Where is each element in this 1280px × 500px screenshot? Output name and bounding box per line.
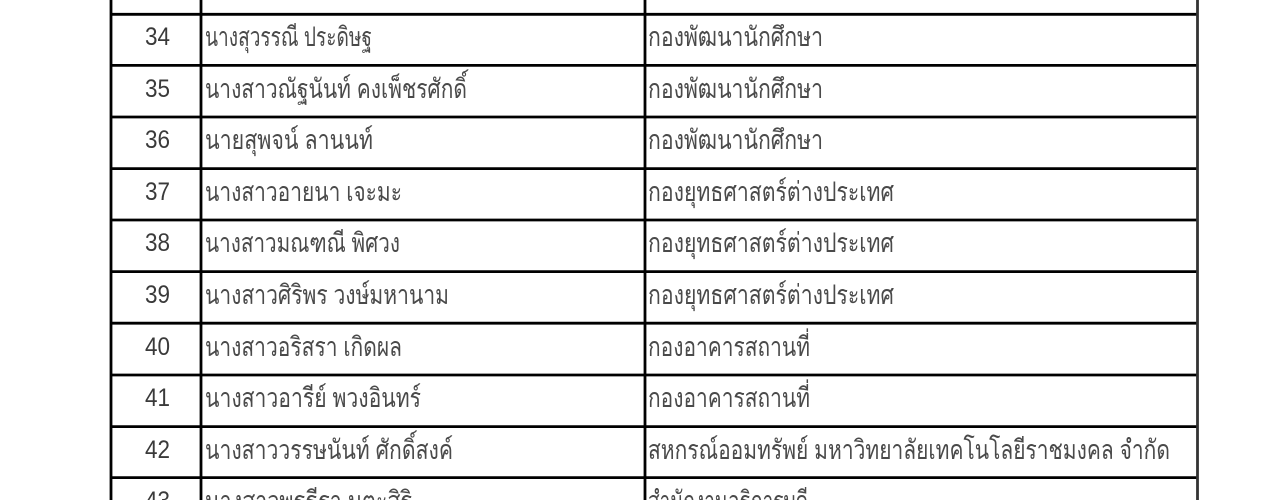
row 38 [145,227,894,260]
row 37 [145,176,894,209]
row 38: นางสาวมณฑณี พิศวง [205,228,400,258]
row 35: กองพัฒนานักศึกษา [648,74,823,104]
row 37: นางสาวอายนา เจะมะ [205,177,402,207]
row 34: นางสุวรรณี ประดิษฐ [205,22,372,54]
row 37: กองยุทธศาสตร์ต่างประเทศ [648,176,894,209]
row 36: นายสุพจน์ ลานนท์ [205,124,373,157]
row 38: กองยุทธศาสตร์ต่างประเทศ [648,227,894,260]
row 43 (clipped at bottom edge) [145,486,808,500]
row 40: นางสาวอริสรา เกิดผล [205,332,402,362]
row 39: นางสาวศิริพร วงษ์มหานาม [205,279,449,310]
row 39 [145,279,894,312]
row 40: 40 [145,333,170,361]
row 34 [145,22,823,54]
row 38: 38 [145,229,170,257]
row 39: 39 [145,281,170,309]
row 40: กองอาคารสถานที่ [648,328,810,362]
row 34: 34 [145,23,170,51]
row 35 [145,69,823,105]
row 42: นางสาววรรษนันท์ ศักดิ์สงค์ [205,430,453,465]
row 41: นางสาวอารีย์ พวงอินทร์ [205,382,421,413]
row 41: 41 [145,384,170,412]
row 40 [145,328,810,362]
row 41 [145,379,810,413]
row 34: กองพัฒนานักศึกษา [648,22,823,52]
row 41: กองอาคารสถานที่ [648,379,810,413]
row 35: นางสาวณัฐนันท์ คงเพ็ชรศักดิ์ [205,69,469,105]
row 36 [145,124,823,157]
row 39: กองยุทธศาสตร์ต่างประเทศ [648,279,894,312]
row 36: กองพัฒนานักศึกษา [648,125,823,155]
row 42 [145,430,1170,465]
row 37: 37 [145,178,170,206]
row 42: 42 [145,436,170,464]
row 36: 36 [145,126,170,154]
row 35: 35 [145,75,170,103]
